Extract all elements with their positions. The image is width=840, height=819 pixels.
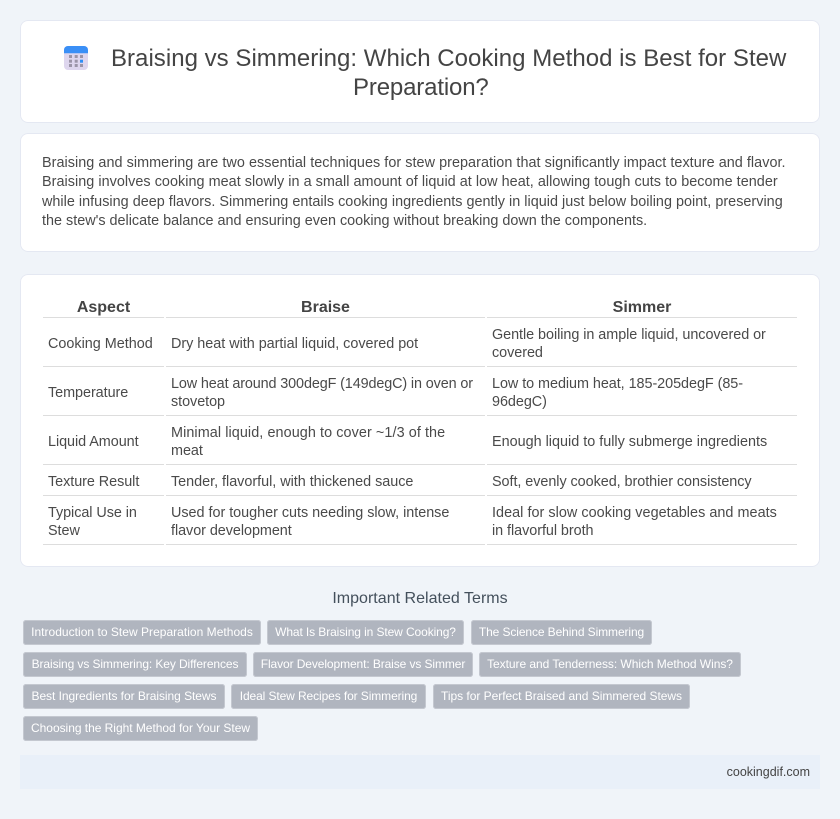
related term tags: Ideal Stew Recipes for Simmering bbox=[240, 689, 417, 703]
row: temperature bbox=[48, 376, 743, 410]
row: cooking method bbox=[48, 327, 766, 361]
header card bbox=[20, 20, 820, 123]
row: cooking method: Cooking Method bbox=[48, 336, 153, 352]
row: texture result: Tender, flavorful, with thickened sauce bbox=[171, 474, 413, 490]
heading: important related terms: Important Related Terms bbox=[332, 590, 508, 607]
row: texture result bbox=[48, 474, 752, 490]
table header: Braise bbox=[301, 299, 350, 316]
footer source: cookingdif.com bbox=[727, 765, 810, 779]
row: typical use in stew bbox=[48, 505, 777, 539]
row: liquid amount: Minimal liquid, enough to cover ~1/3 of the bbox=[171, 425, 445, 441]
intro text panel bbox=[20, 133, 820, 252]
row: typical use in stew: Ideal for slow cooking vegetables and meats bbox=[492, 505, 777, 521]
row: temperature: Low heat around 300degF (149degC) in oven or bbox=[171, 376, 473, 392]
related term tags: Choosing the Right Method for Your Stew bbox=[31, 721, 250, 735]
row: typical use in stew: Stew bbox=[48, 523, 80, 539]
icon: calendar grid bbox=[64, 46, 88, 70]
related term tags: Tips for Perfect Braised and Simmered Stews bbox=[441, 689, 682, 703]
footer bar bbox=[20, 755, 820, 789]
related term tags bbox=[23, 620, 741, 741]
comparison table panel bbox=[20, 274, 820, 567]
related term tags: Best Ingredients for Braising Stews bbox=[31, 689, 216, 703]
row: typical use in stew: in flavorful broth bbox=[492, 523, 594, 539]
row: temperature: Temperature bbox=[48, 385, 128, 401]
title bbox=[111, 45, 786, 101]
row: liquid amount bbox=[48, 425, 767, 459]
related term tags: Introduction to Stew Preparation Methods bbox=[31, 625, 253, 639]
intro text panel: the stew's delicate balance and ensuring even cooking without breaking down the components. bbox=[42, 213, 647, 229]
table header: Simmer bbox=[613, 299, 671, 316]
title: Braising vs Simmering: Which Cooking Method is Best for Stew bbox=[111, 45, 786, 72]
row: liquid amount: Enough liquid to fully submerge ingredients bbox=[492, 434, 767, 450]
related term tags: Flavor Development: Braise vs Simmer bbox=[261, 657, 465, 671]
intro text panel: Braising involves cooking meat slowly in a small amount of liquid at low heat, allowing tough cuts to become tender bbox=[42, 174, 778, 190]
row: typical use in stew: Used for tougher cuts needing slow, intense bbox=[171, 505, 449, 521]
related term tags: Braising vs Simmering: Key Differences bbox=[32, 657, 238, 671]
table header bbox=[77, 299, 672, 316]
row: typical use in stew: flavor development bbox=[171, 523, 292, 539]
related term tags: What Is Braising in Stew Cooking? bbox=[275, 625, 456, 639]
row: texture result: Texture Result bbox=[48, 474, 139, 490]
row: temperature: 96degC) bbox=[492, 394, 547, 410]
intro text panel: Braising and simmering are two essential techniques for stew preparation that significantly impact texture and flavor. bbox=[42, 155, 786, 171]
row: texture result: Soft, evenly cooked, brothier consistency bbox=[492, 474, 752, 490]
row: cooking method: covered bbox=[492, 345, 543, 361]
row: temperature: Low to medium heat, 185-205degF (85- bbox=[492, 376, 743, 392]
row: cooking method: Dry heat with partial liquid, covered pot bbox=[171, 336, 418, 352]
row: temperature: stovetop bbox=[171, 394, 225, 410]
row: cooking method: Gentle boiling in ample liquid, uncovered or bbox=[492, 327, 766, 343]
table header: Aspect bbox=[77, 299, 130, 316]
row: liquid amount: meat bbox=[171, 443, 203, 459]
related term tags: The Science Behind Simmering bbox=[479, 625, 644, 639]
related term tags: Texture and Tenderness: Which Method Wins? bbox=[487, 657, 733, 671]
row: liquid amount: Liquid Amount bbox=[48, 434, 139, 450]
title: Preparation? bbox=[353, 74, 489, 101]
row: typical use in stew: Typical Use in bbox=[48, 505, 137, 521]
intro text panel: while infusing deep flavors. Simmering entails cooking ingredients gently in liquid just below boiling point, preserving bbox=[42, 194, 783, 210]
